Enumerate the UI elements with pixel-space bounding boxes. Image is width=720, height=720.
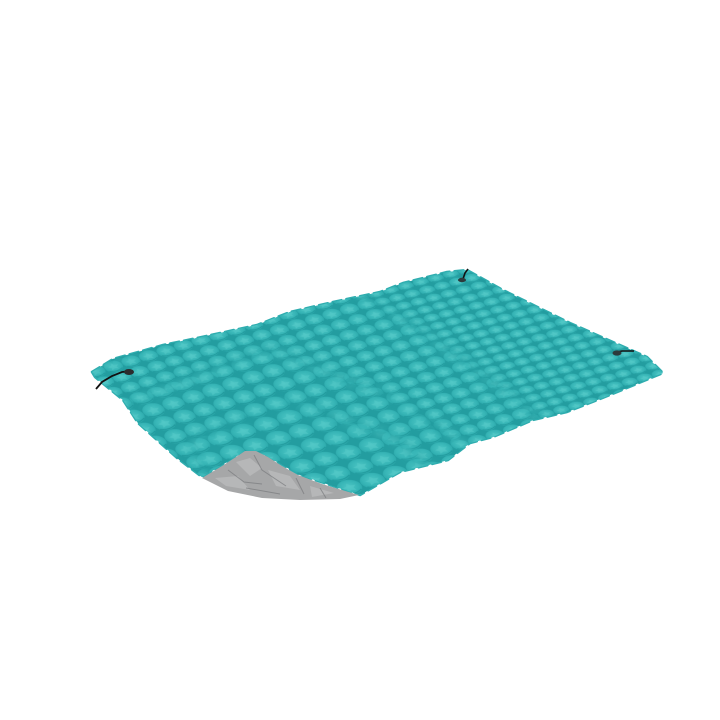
scalloped mat edge [92,270,663,495]
cord: top corner [458,269,468,282]
illustration: floating mat product photo [90,268,663,500]
bubble texture [92,270,663,494]
folded corner: grey underside [202,451,359,500]
cord: right corner [612,350,634,356]
mat body: teal bubble surface [90,269,663,496]
cord: left corner [96,369,134,389]
